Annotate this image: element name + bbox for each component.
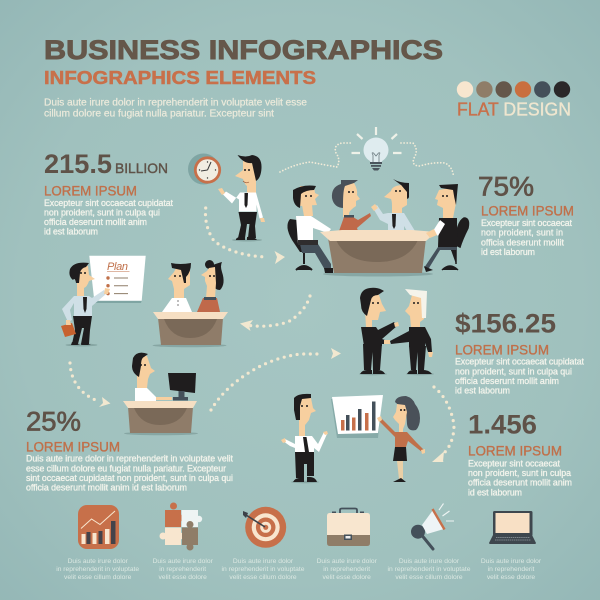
desk: [152, 344, 226, 347]
stat: 215.5 billion: BILLION: [115, 161, 168, 176]
caption: velit esse cillum dolore: [229, 574, 297, 581]
man with white hair: [390, 289, 434, 375]
stat: 1.456: Excepteur sint occaecat: [468, 458, 561, 468]
icon: target with dart: [243, 507, 286, 548]
stat: $156.25: id est laborum: [455, 386, 510, 396]
colour swatches: [457, 81, 570, 98]
stat: 215.5 billion: officia deserunt mollit anim: [44, 217, 147, 227]
caption: Duis aute irure dolor: [233, 558, 294, 565]
caption: [481, 558, 542, 581]
table: [320, 230, 436, 273]
stat: 75%: non proident, sunt in: [481, 228, 563, 238]
caption: velit esse cillum dolore: [64, 574, 132, 581]
stat: 25%: sint occaecat cupidatat non proident, sunt in culpa qui: [26, 473, 233, 483]
flat design label: FLAT DESIGN: [457, 100, 571, 120]
stat: 1.456: officia deserunt mollit anim: [468, 478, 572, 488]
stat: 75%: [478, 172, 574, 257]
intro text: Duis aute irure dolor in reprehenderit in voluptate velit esse: [44, 98, 307, 108]
man at desk: [162, 263, 192, 312]
caption: Duis aute irure dolor: [68, 558, 129, 565]
chart board: [331, 395, 383, 438]
stat: 1.456: 1.456: [468, 409, 537, 439]
intro text: cillum dolore eu fugiat nulla pariatur. Excepteur sint: [44, 108, 274, 120]
stat: 25%: [26, 407, 234, 493]
stat: 215.5 billion: 215.5: [44, 149, 112, 179]
plan board: Plan: [107, 261, 128, 273]
dotted arrow: handshake to chart: [432, 387, 454, 462]
stat: 1.456: id est laborum: [468, 487, 522, 497]
stat: 215.5 billion: id est laborum: [44, 227, 98, 237]
caption: [317, 558, 378, 581]
stat: 25%: Duis aute irure dolor in reprehenderit in voluptate velit: [26, 454, 234, 464]
caption: in reprehenderit in voluptate: [222, 566, 305, 573]
stat: 75%: Excepteur sint occaecat: [481, 218, 573, 228]
stat: 215.5 billion: Excepteur sint occaecat cupidatat: [44, 198, 174, 208]
computer monitor: [168, 373, 196, 400]
stat: 75%: 75%: [478, 172, 534, 202]
stat: $156.25: LOREM IPSUM: [455, 342, 549, 357]
meeting scene: [287, 179, 468, 276]
figure: man with white shirt: [281, 394, 328, 483]
stat: 1.456: LOREM IPSUM: [468, 444, 562, 459]
subtitle: INFOGRAPHICS ELEMENTS: [44, 68, 316, 88]
icon: megaphone: [411, 504, 454, 549]
person: left man in chair: [287, 186, 333, 273]
caption: in reprehenderit in voluptate: [388, 566, 471, 573]
man with black hair: [359, 288, 399, 375]
caption: velit esse dolore: [323, 574, 371, 581]
caption: Duis aute irure dolor: [317, 558, 378, 565]
caption: in reprehenderit: [488, 566, 535, 573]
stat: 25%: officia deserunt mollit anim id est laborum: [26, 483, 187, 493]
caption: in reprehenderit: [159, 566, 206, 573]
caption: in reprehenderit: [323, 566, 370, 573]
stat: 75%: id est laborum: [481, 247, 535, 257]
title: BUSINESS INFOGRAPHICS: [44, 35, 443, 65]
caption: velit esse cillum dolore: [395, 574, 463, 581]
dotted arrow: presenter to computer desk: [70, 363, 110, 407]
stat: $156.25: non proident, sunt in culpa qui: [455, 366, 572, 376]
plan board: [89, 256, 146, 303]
dotted arrow: computer desk to handshake: [211, 348, 341, 410]
caption: velit esse dolore: [487, 574, 535, 581]
stat: $156.25: $156.25: [455, 308, 556, 338]
figure: presenter man: [61, 263, 110, 346]
stat: 75%: officia deserunt mollit: [481, 237, 565, 247]
caption: [222, 558, 305, 581]
person: man in light shirt: [371, 179, 415, 236]
stat: 25%: 25%: [26, 407, 81, 437]
dotted arrow: desk back from handshake: [240, 296, 310, 331]
table shadow: [323, 272, 433, 276]
caption: [56, 558, 139, 581]
figure: woman presenting chart: [377, 396, 425, 482]
caption: Duis aute irure dolor: [153, 558, 214, 565]
icon: laptop: [489, 511, 536, 544]
handshake figures: [359, 288, 434, 375]
stat: 215.5 billion: LOREM IPSUM: [44, 184, 137, 198]
stat: 1.456: non proident, sunt in culpa: [468, 468, 571, 478]
icon: briefcase: [327, 508, 370, 546]
icon: growth chart: [78, 505, 119, 549]
stat: $156.25: officia deserunt mollit anim: [455, 376, 559, 386]
intro text: [44, 98, 307, 120]
caption: Duis aute irure dolor: [481, 558, 542, 565]
caption: [153, 558, 214, 581]
stat: $156.25: [455, 308, 585, 396]
stat: 75%: LOREM IPSUM: [481, 204, 574, 219]
caption: velit esse dolore: [159, 574, 207, 581]
icon: wall clock: [188, 154, 221, 184]
stat: 1.456: [468, 409, 572, 497]
stat: 25%: LOREM IPSUM: [26, 440, 120, 455]
stat: $156.25: Excepteur sint occaecat cupidatat: [455, 357, 585, 367]
desk: [124, 432, 198, 435]
stat: 215.5 billion: non proident, sunt in culpa qui: [44, 207, 160, 217]
person: right man in black: [424, 184, 468, 272]
dotted idea lines: [280, 143, 454, 177]
caption: in reprehenderit in voluptate: [56, 566, 139, 573]
caption: Duis aute irure dolor: [399, 558, 460, 565]
stat: 25%: esse cillum dolore eu fugiat nulla pariatur. Excepteur: [26, 463, 226, 473]
computer desk scene: [123, 353, 198, 435]
icon: puzzle pieces: [160, 502, 202, 550]
stat: 215.5 billion: [44, 149, 174, 237]
icon: lightbulb with rays: [352, 127, 402, 170]
figure: man pointing at clock: [218, 155, 265, 242]
man at computer: [132, 353, 172, 401]
person: woman in orange: [332, 180, 371, 231]
woman at desk: [197, 260, 224, 312]
dotted arrow: clock man to meeting: [205, 208, 285, 264]
desk with two colleagues: [152, 260, 228, 347]
caption: [388, 558, 471, 581]
